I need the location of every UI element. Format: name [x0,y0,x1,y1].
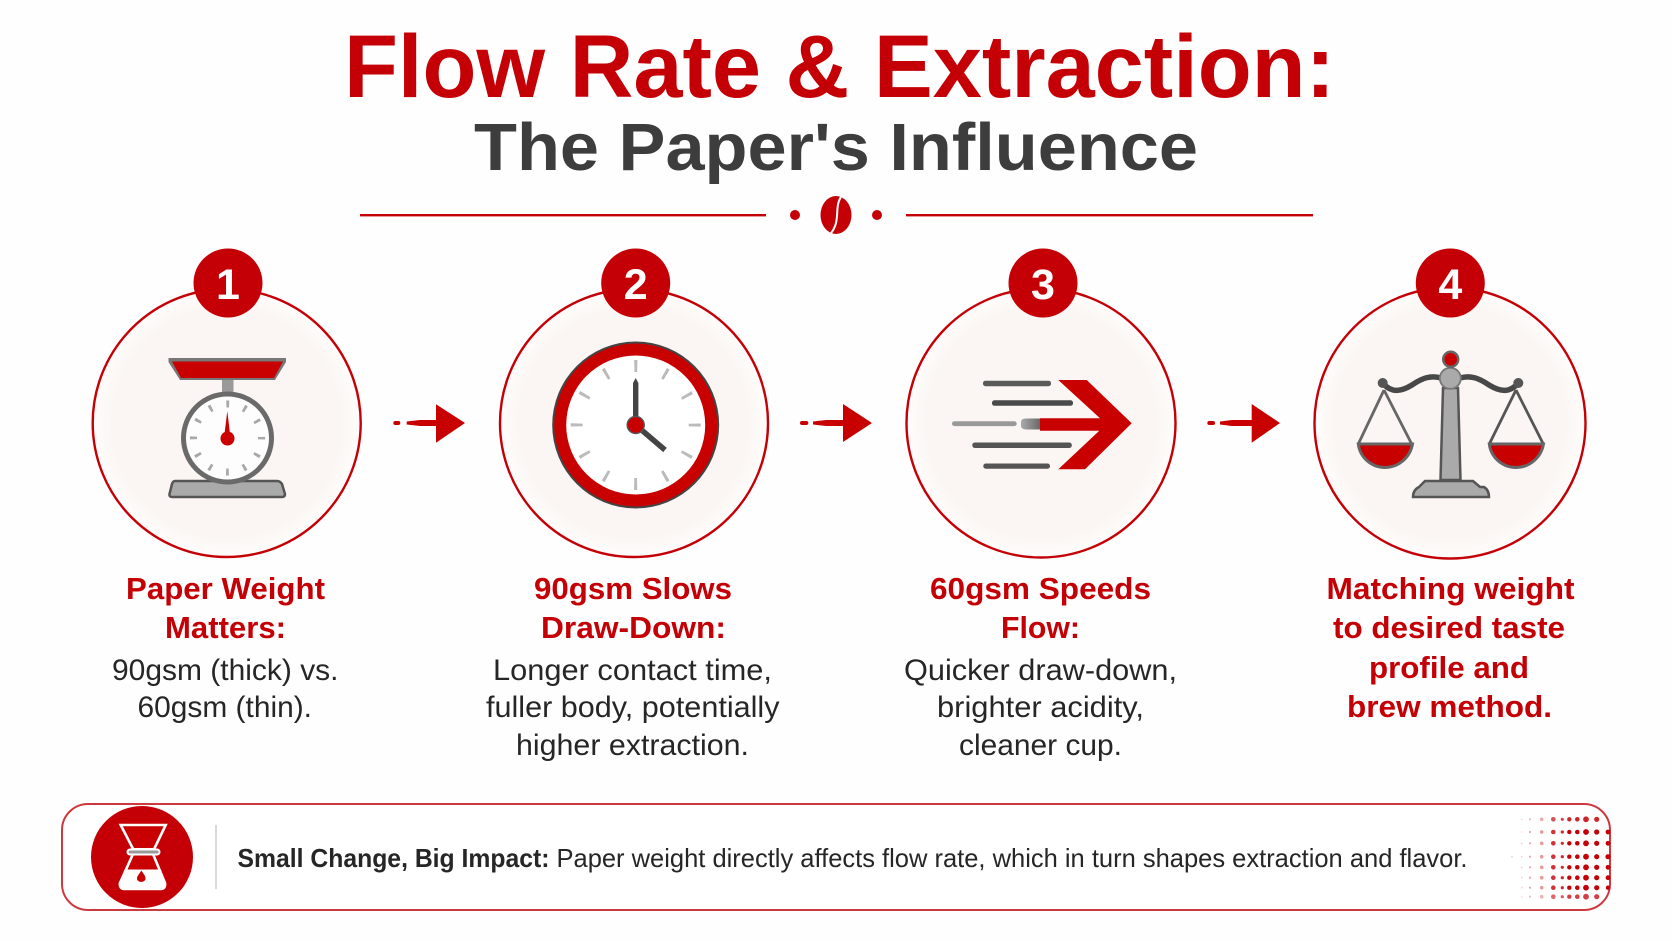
step 2 body text [486,654,780,762]
step 3 heading [930,571,1151,645]
step number badge 3 [1008,248,1078,318]
icon: balance scale [1358,352,1544,497]
panel: step 1 paper weight [93,248,361,724]
step 3 body text: brighter acidity, [937,691,1144,724]
title: Flow Rate & Extraction: [344,16,1335,116]
icon: clock [552,342,719,508]
vertical separator [215,825,217,889]
step number badge 4 [1416,248,1485,318]
step 1 body text: 90gsm (thick) vs. [112,654,338,687]
step 3 body text: cleaner cup. [959,729,1122,762]
step number badge 2: 2 [624,261,648,309]
takeaway text: Paper weight directly affects flow rate, which in turn shapes extraction and flavor. [556,843,1468,873]
title [344,16,1335,185]
step 2 heading: 90gsm Slows [534,571,732,606]
step 2 circle [500,289,768,557]
takeaway frame [62,804,1610,910]
step 2 body text: fuller body, potentially [486,691,780,724]
step 1 body text: 60gsm (thin). [138,691,312,724]
step 1 heading: Paper Weight [126,571,325,606]
panel: step 4 matching weight [1314,248,1586,724]
subtitle: The Paper's Influence [474,110,1198,185]
step number badge 1: 1 [216,261,240,309]
icon: chemex dripper badge [91,806,193,908]
step 2 body text: higher extraction. [516,729,749,762]
panel: step 3 60gsm [904,248,1177,762]
panel: step 2 90gsm [486,248,780,762]
panel: bottom takeaway [62,804,1611,910]
step 4 heading: profile and [1369,650,1529,685]
step number badge 3: 3 [1031,261,1055,309]
takeaway text: Small Change, Big Impact: [238,843,550,873]
step 3 body text [904,654,1177,762]
step 3 heading: Flow: [1001,610,1080,645]
icon: halftone dots [1511,816,1611,900]
step 2 body text: Longer contact time, [493,654,772,687]
arrow: step 1 to 2 [393,404,465,443]
step 4 heading [1326,571,1574,724]
icon: speed arrow [952,380,1132,469]
step 2 heading: Draw-Down: [541,610,726,645]
arrow: step 2 to 3 [800,404,872,442]
step 2 heading [534,571,732,645]
step 1 heading [126,571,325,645]
icon: kitchen scale [168,358,286,497]
step 4 circle [1314,288,1586,558]
step 1 body text [112,654,338,724]
step number badge 4: 4 [1438,261,1462,309]
step 4 heading: to desired taste [1333,610,1565,645]
step 4 heading: Matching weight [1326,571,1574,606]
step 3 circle [906,288,1176,558]
title divider with coffee bean [360,196,1313,234]
step number badge 1 [194,248,262,318]
step 1 circle [93,289,361,557]
step 1 heading: Matters: [165,610,286,645]
step 3 heading: 60gsm Speeds [930,571,1151,606]
step 4 heading: brew method. [1347,689,1552,724]
arrow: step 3 to 4 [1207,404,1280,443]
step number badge 2 [601,248,670,318]
step 3 body text: Quicker draw-down, [904,654,1177,687]
